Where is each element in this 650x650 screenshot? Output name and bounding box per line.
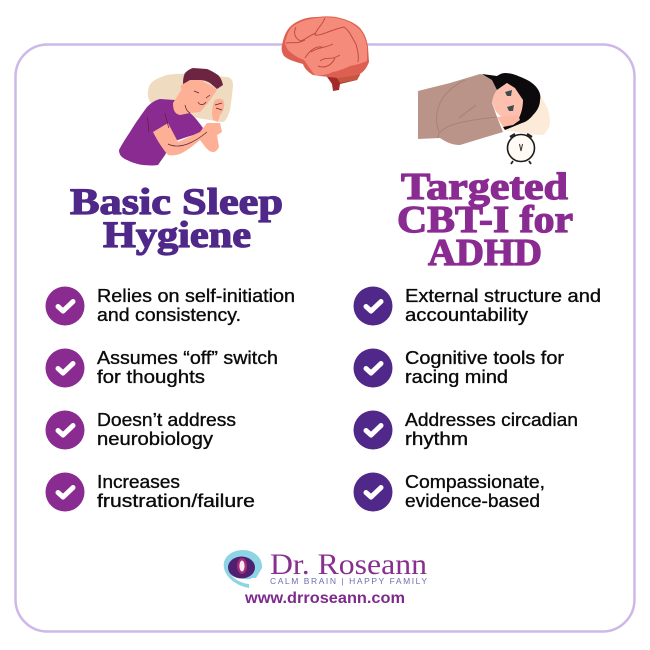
item 2: Cognitive tools for [405,347,564,368]
heading: Basic Sleep Hygiene: Basic Sleep [70,182,283,223]
eyes [505,90,514,111]
hands [497,115,520,127]
pillow [148,74,233,122]
heading: Basic Sleep Hygiene [70,182,283,256]
body [418,74,503,145]
item 3: Addresses circadian [405,409,578,430]
item 4: Increases [97,471,180,492]
item 1: Relies on self-initiation [97,285,295,306]
item 4: frustration/failure [97,490,255,511]
icon: sleeping man [119,68,233,165]
heading: Basic Sleep Hygiene: Hygiene [103,215,251,256]
ear [181,84,187,90]
item 3: Doesn’t address [97,409,236,430]
face and body lines [147,91,222,146]
arms [153,123,222,155]
item 3 [354,409,578,450]
logo: Dr. Roseann [224,548,427,588]
item 2: racing mind [405,366,508,387]
list: Targeted CBT-I points [354,285,601,512]
item 2: Assumes “off” switch [97,347,278,368]
neck and face [173,80,217,115]
heading: Targeted CBT-I for ADHD: CBT-I for [397,199,573,241]
icon: brain [282,16,369,91]
logo: Dr. Roseann: Dr. Roseann [270,548,427,581]
list: Basic Sleep Hygiene points [46,285,295,512]
fist [212,99,224,122]
item 1 [46,285,295,326]
item 4 [354,471,545,512]
heading: Targeted CBT-I for ADHD: Targeted [401,166,568,208]
icon: woman lying with clock [418,73,550,164]
hair [482,73,540,130]
item 2: for thoughts [97,366,205,387]
item 2 [354,347,564,388]
heading: Targeted CBT-I for ADHD [397,166,573,274]
item 4: evidence-based [405,490,540,511]
item 2 [46,347,278,388]
shirt [119,99,203,165]
icon: logo head [224,550,262,588]
face [492,83,523,120]
item 4: Compassionate, [405,471,545,492]
item 4 [46,471,255,512]
hair [183,68,223,89]
item 1: External structure and [405,285,601,306]
logo: Dr. Roseann: CALM BRAIN | HAPPY FAMILY [270,576,427,586]
item 1: accountability [405,304,529,325]
item 3: neurobiology [97,428,214,449]
clock [508,134,534,164]
website url: www.drroseann.com [244,590,405,607]
item 3 [46,409,236,450]
heading: Targeted CBT-I for ADHD: ADHD [428,232,542,274]
item 1: and consistency. [97,304,241,325]
pillow [503,90,550,135]
item 1 [354,285,601,326]
item 3: rhythm [405,428,468,449]
